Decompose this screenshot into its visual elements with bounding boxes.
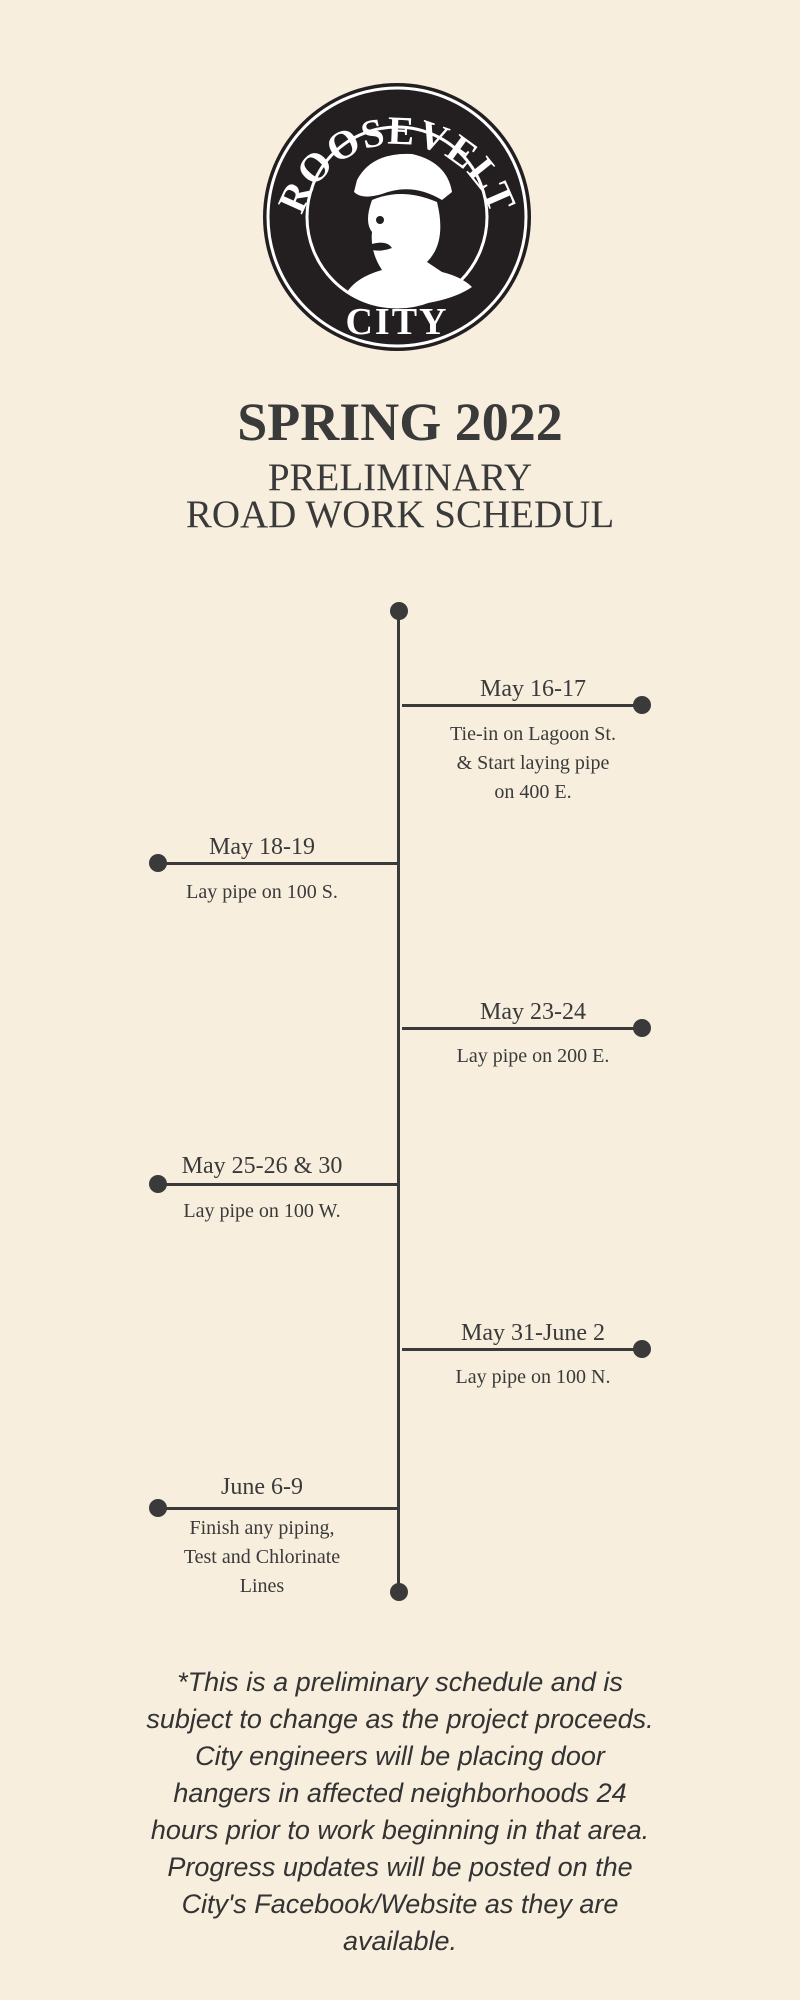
subtitle: ROAD WORK SCHEDUL	[186, 493, 614, 536]
footnote: Progress updates will be posted on the	[167, 1852, 633, 1882]
entry: June 6-9: June 6-9	[221, 1474, 303, 1500]
entry: May 18-19: May 18-19	[209, 834, 315, 860]
entry: May 23-24: Lay pipe on 200 E.	[457, 1045, 609, 1067]
entry: May 16-17: May 16-17	[480, 676, 586, 702]
subtitle	[186, 456, 614, 536]
entry: May 16-17: Tie-in on Lagoon St.	[450, 723, 616, 745]
entry: May 23-24: May 23-24	[480, 999, 586, 1025]
entry: June 6-9: Test and Chlorinate	[184, 1546, 340, 1568]
footnote: hours prior to work beginning in that area.	[151, 1815, 649, 1845]
entry: June 6-9: Finish any piping,	[189, 1517, 334, 1539]
entry: May 31-June 2	[402, 1320, 651, 1388]
footnote: City engineers will be placing door	[195, 1741, 605, 1771]
logo: ROOSEVELT	[278, 117, 516, 214]
entry: May 25-26 & 30	[149, 1153, 397, 1222]
entry: May 23-24	[402, 999, 651, 1067]
footnote: hangers in affected neighborhoods 24	[173, 1778, 627, 1808]
entry: May 31-June 2: May 31-June 2	[461, 1320, 605, 1346]
footnote: City's Facebook/Website as they are	[182, 1889, 618, 1919]
entry: May 31-June 2: Lay pipe on 100 N.	[456, 1366, 610, 1388]
title: SPRING 2022	[237, 392, 563, 452]
entry: May 16-17	[402, 676, 651, 803]
entry: May 16-17: & Start laying pipe	[457, 752, 609, 774]
footnote: available.	[343, 1926, 457, 1956]
timeline	[390, 602, 408, 1601]
footnote	[146, 1667, 654, 1956]
entry: May 25-26 & 30: Lay pipe on 100 W.	[183, 1200, 341, 1222]
subtitle: PRELIMINARY	[268, 456, 532, 499]
entry: May 18-19: Lay pipe on 100 S.	[186, 881, 338, 903]
logo: CITY	[345, 301, 449, 343]
entry: June 6-9: Lines	[240, 1575, 284, 1597]
entry: May 25-26 & 30: May 25-26 & 30	[182, 1153, 342, 1179]
entry: May 16-17: on 400 E.	[494, 781, 572, 803]
entry: May 18-19	[149, 834, 397, 903]
footnote: subject to change as the project proceeds.	[146, 1704, 654, 1734]
footnote: *This is a preliminary schedule and is	[177, 1667, 623, 1697]
logo	[263, 83, 531, 351]
entry: June 6-9	[149, 1474, 397, 1597]
